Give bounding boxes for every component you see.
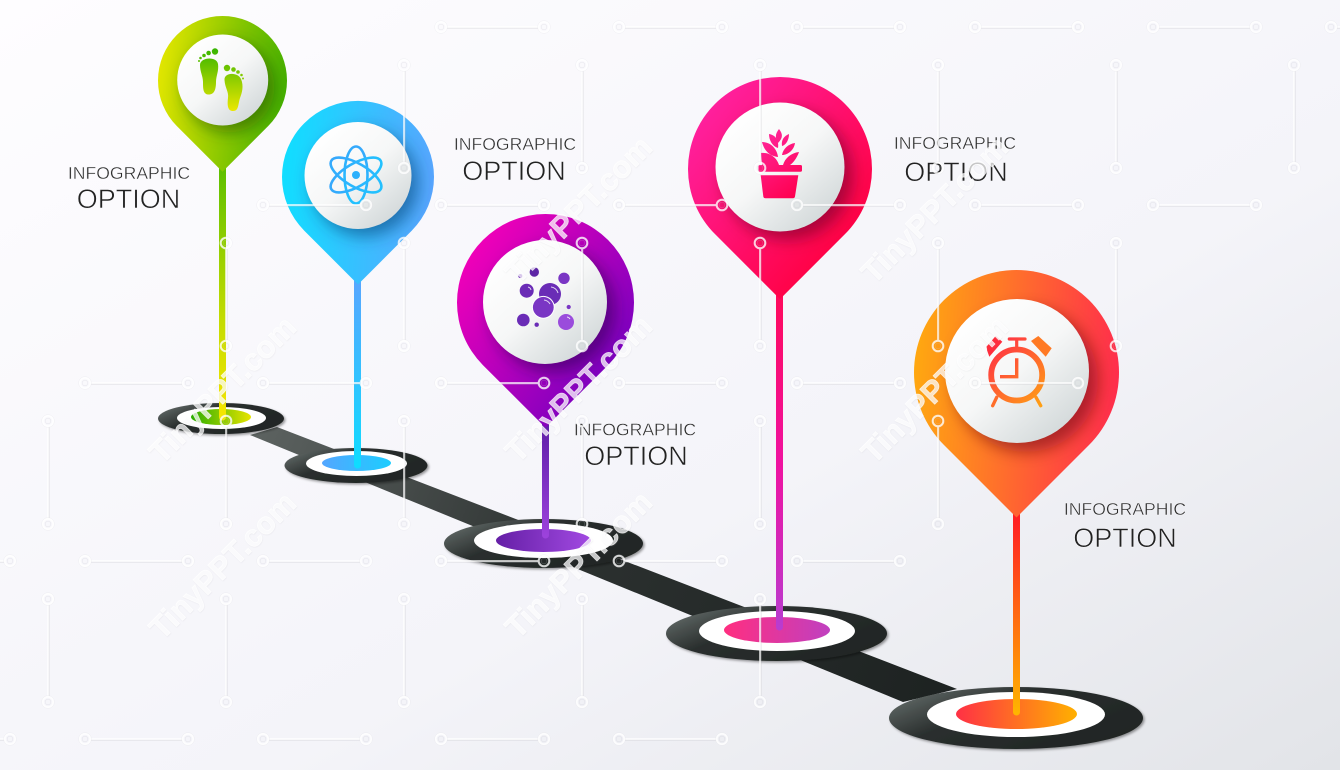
pin 5 white circle (945, 299, 1089, 443)
icon: atom (326, 146, 386, 204)
watermarks: TinyPPT.com (854, 309, 1015, 470)
pin 4: pink plant (688, 77, 872, 627)
pin 5 head (914, 270, 1119, 518)
watermarks: TinyPPT.com (142, 309, 303, 470)
pin 5 shadow (954, 308, 1098, 452)
label: option 3 (574, 420, 696, 471)
label: option 3: INFOGRAPHIC (574, 420, 696, 440)
pin 3: purple bubbles (457, 214, 634, 535)
label: option 4: OPTION (904, 157, 1008, 187)
pin 1 shadow (184, 42, 274, 132)
label: option 1: OPTION (77, 184, 180, 214)
label: option 1: INFOGRAPHIC (68, 163, 190, 183)
pin 4 stem (776, 290, 783, 627)
step 1 base disc (158, 403, 284, 434)
label: option 1 (68, 163, 190, 214)
label: option 2: OPTION (462, 156, 566, 186)
pin 3 stem (542, 420, 549, 535)
label: option 4: INFOGRAPHIC (894, 133, 1016, 153)
pin 5: orange alarm clock (914, 270, 1119, 712)
pin 1 stem (219, 165, 226, 417)
watermarks: TinyPPT.com (498, 308, 659, 469)
pin 4 head (688, 77, 872, 299)
label: option 2: INFOGRAPHIC (454, 134, 576, 154)
watermarks: TinyPPT.com (498, 129, 659, 290)
pin 4 shadow (724, 110, 852, 240)
pin 2 shadow (312, 130, 418, 236)
pin 1: green footprints (158, 16, 287, 417)
label: option 5 (1064, 499, 1186, 553)
watermarks (142, 129, 1015, 646)
icon: potted plant (758, 129, 802, 198)
step 5 base disc (889, 687, 1143, 749)
pin 3 shadow (491, 248, 615, 372)
pin 2 stem (354, 275, 361, 465)
road: dark timeline path (250, 427, 957, 702)
pin 3 white circle (483, 240, 607, 364)
label: option 5: INFOGRAPHIC (1064, 499, 1186, 519)
step 3 base disc (444, 519, 643, 568)
watermarks: TinyPPT.com (498, 484, 659, 645)
pin 2 white circle (304, 122, 412, 229)
step 2 base disc (284, 448, 428, 483)
icon: bubbles (517, 267, 574, 330)
icon: alarm clock (986, 336, 1052, 406)
label: option 2 (454, 134, 576, 186)
watermarks: TinyPPT.com (854, 129, 1015, 290)
label: option 4 (894, 133, 1016, 187)
pin 4 white circle (716, 102, 844, 232)
pin 3 head (457, 214, 634, 428)
step 4 base disc (666, 606, 887, 661)
pin 1 white circle (177, 34, 268, 126)
pin 1 head (158, 16, 287, 172)
pin 2: blue atom (282, 101, 434, 465)
icon: footprints (198, 48, 244, 111)
watermarks: TinyPPT.com (142, 485, 303, 646)
pin 5 stem (1013, 505, 1020, 712)
label: option 5: OPTION (1073, 523, 1177, 553)
label: option 3: OPTION (584, 441, 688, 471)
pin 2 head (282, 101, 434, 284)
